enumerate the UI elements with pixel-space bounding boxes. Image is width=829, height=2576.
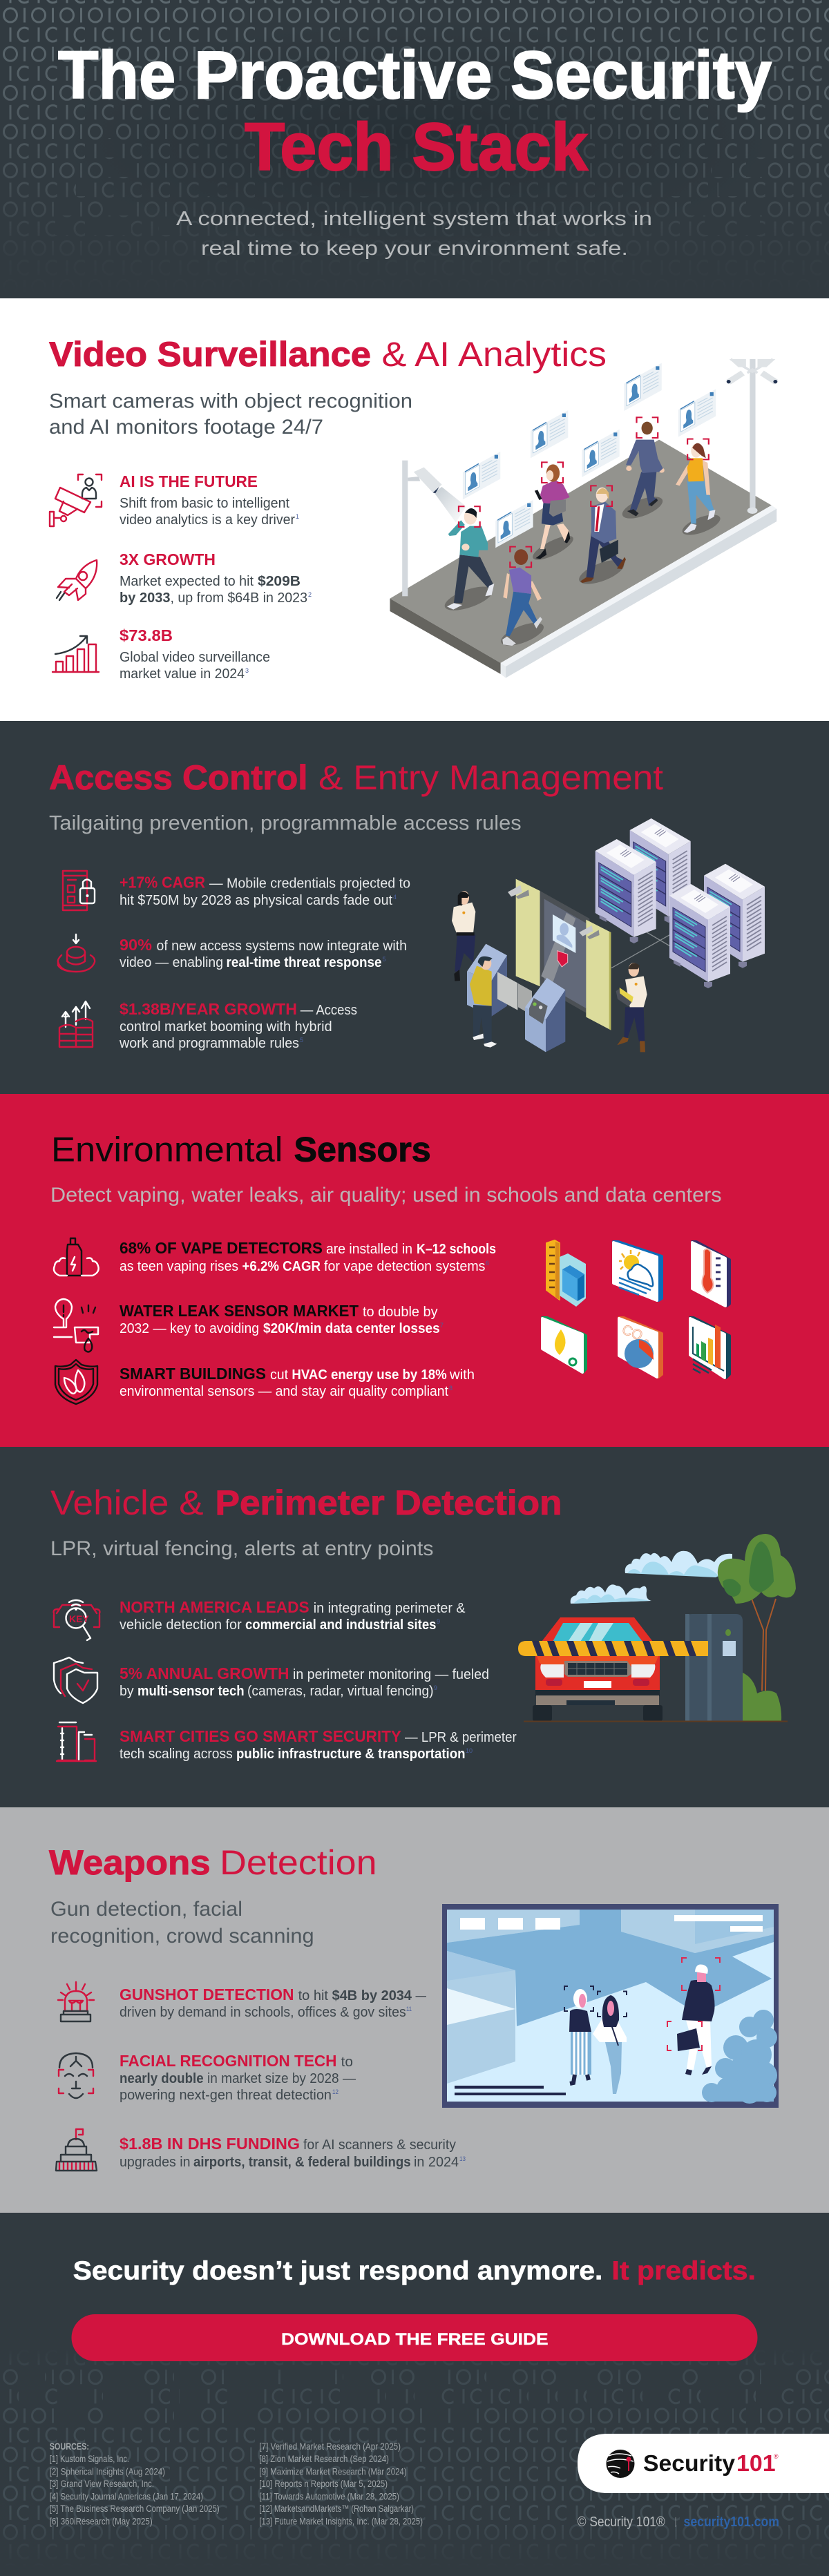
stat text: are installed in — [326, 1242, 412, 1257]
heading — [51, 1131, 431, 1169]
sources: [2] Spherical Insights (Aug 2024) — [50, 2466, 165, 2477]
tile: thermometer — [692, 1242, 730, 1306]
heading: Detection — [220, 1843, 377, 1882]
person: man with bag — [677, 1964, 714, 2075]
screen overlays — [455, 1915, 763, 2095]
closing statement: Security doesn’t just respond anymore. — [73, 2257, 602, 2286]
panel: weapons detection — [0, 1807, 829, 2213]
clouds — [571, 1551, 732, 1604]
stat text: 3X GROWTH — [120, 550, 216, 568]
bush — [743, 1673, 781, 1721]
logo badge: Security — [643, 2450, 736, 2476]
stat: north america — [54, 1598, 466, 1640]
stat text: GUNSHOT DETECTION — [120, 1986, 294, 2003]
stat text — [120, 1239, 496, 1274]
section description: and AI monitors footage 24/7 — [49, 416, 323, 439]
person: yellow top — [676, 443, 723, 539]
button: DOWNLOAD THE FREE GUIDE — [281, 2330, 549, 2349]
sources: [5] The Business Research Company (Jan 2025) — [50, 2503, 220, 2514]
stat text: by — [120, 1684, 134, 1699]
stat text: 13 — [459, 2155, 466, 2162]
stat text: hit $750M by 2028 as physical cards fade out — [120, 893, 392, 908]
stat text: environmental sensors — and stay air quality compliant — [120, 1384, 448, 1399]
title: The Proactive Security — [58, 37, 772, 113]
icon: capitol building — [56, 2129, 97, 2171]
scene background — [447, 1910, 774, 2102]
stat text: 7 — [440, 1322, 444, 1329]
guard left — [452, 891, 475, 981]
stat text: video analytics is a key driver — [120, 512, 295, 528]
icon: skyscrapers — [57, 1722, 96, 1761]
sources: [8] Zion Market Research (Sep 2024) — [259, 2453, 389, 2464]
subtitle: real time to keep your environment safe. — [201, 238, 628, 260]
section description: Detect vaping, water leaks, air quality; used in schools and data centers — [50, 1184, 722, 1207]
tree — [718, 1534, 796, 1691]
icon: siren — [58, 1982, 94, 2021]
stat text: 3 — [245, 667, 249, 674]
stat: mobile credentials — [63, 871, 410, 910]
sources: [6] 360iResearch (May 2025) — [50, 2515, 153, 2526]
stat text: SMART BUILDINGS — [120, 1365, 266, 1383]
heading — [49, 335, 607, 374]
sources: [3] Grand View Research, Inc. — [50, 2478, 154, 2489]
stat text: — LPR & perimeter — [405, 1730, 517, 1745]
stat text: $209B — [258, 574, 301, 589]
stat: AI is the future — [50, 472, 299, 528]
stat text: as teen vaping rises — [120, 1259, 238, 1274]
heading: Sensors — [294, 1131, 431, 1169]
tile: bar chart — [690, 1318, 730, 1378]
panel: environmental sensors — [0, 1094, 829, 1447]
stat text: 5 — [383, 956, 386, 963]
button — [72, 2314, 757, 2361]
stat text: Shift from basic to intelligent — [120, 496, 289, 511]
stat text: 5 — [300, 1037, 303, 1044]
stat text: 12 — [332, 2088, 339, 2095]
stat text: FACIAL RECOGNITION TECH — [120, 2052, 337, 2070]
icon: car under magnifier: KEY — [69, 1613, 89, 1624]
stat text: 5% ANNUAL GROWTH — [120, 1664, 289, 1682]
stat text: K–12 schools — [417, 1242, 496, 1257]
copyright and website: © Security 101® — [578, 2515, 665, 2530]
section description — [49, 390, 412, 439]
stat text — [120, 550, 312, 606]
illustration: sensor tiles — [542, 1240, 730, 1378]
stat text: WATER LEAK SENSOR MARKET — [120, 1302, 359, 1320]
stat: water leak sensor — [54, 1299, 444, 1352]
stat text — [119, 1000, 357, 1051]
stat text: of new access systems now integrate with — [156, 939, 407, 954]
stat: annual growth — [54, 1657, 489, 1703]
stat text: — Access — [301, 1003, 357, 1018]
section description — [50, 1898, 314, 1948]
stat text: — — [416, 1988, 426, 2003]
left camera pole — [402, 461, 466, 596]
stat text: with — [449, 1367, 475, 1383]
stat: gunshot detection — [58, 1982, 426, 2021]
copyright and website — [578, 2515, 779, 2530]
stat text: $1.8B IN DHS FUNDING — [120, 2135, 300, 2153]
stat text: 11 — [406, 2006, 412, 2012]
heading: & AI Analytics — [381, 335, 607, 374]
stat text: commercial and industrial sites — [245, 1617, 436, 1633]
panel: header — [3, 0, 829, 259]
person: woman with long hair — [593, 1995, 627, 2094]
stat text: nearly double — [120, 2071, 204, 2086]
stat text: Global video surveillance — [120, 650, 270, 665]
person: purple shirt — [497, 549, 547, 650]
stat text: upgrades in — [120, 2155, 191, 2170]
stat text: 2 — [308, 591, 312, 598]
gate — [508, 879, 611, 1030]
stat text — [120, 1598, 466, 1633]
panel: access control — [0, 721, 829, 1094]
icon: face scan — [59, 2053, 93, 2098]
stat text — [120, 1986, 426, 2020]
bushes — [702, 2010, 777, 2104]
panel: video surveillance — [0, 298, 829, 721]
stat text — [120, 626, 270, 682]
truck — [533, 1617, 663, 1721]
icon: vape with cloud — [54, 1238, 99, 1276]
stat: 3X growth — [57, 550, 312, 606]
logo mark — [607, 2450, 634, 2478]
subtitle: A connected, intelligent system that works in — [176, 208, 652, 230]
copyright and website: security101.com — [684, 2515, 779, 2530]
panel: footer — [3, 2260, 829, 2546]
ID cards — [463, 363, 716, 548]
stat: smart buildings — [55, 1360, 475, 1404]
icon: leaf shield — [55, 1360, 97, 1404]
sources: [12] MarketsandMarkets™ (Rohan Salgarkar) — [259, 2503, 414, 2514]
stat: facial recognition — [59, 2052, 356, 2103]
stat text: +6.2% CAGR — [242, 1259, 321, 1274]
sources: [13] Future Market Insights, Inc. (Mar 28, 2025) — [259, 2515, 423, 2526]
stat text: $4B by 2034 — [332, 1988, 412, 2003]
stat text: control market booming with hybrid — [120, 1019, 332, 1035]
person: navy suit — [619, 422, 666, 523]
stat text: 10 — [466, 1747, 473, 1754]
sources: [1] Kustom Signals, Inc. — [50, 2453, 129, 2464]
icon: car under magnifier — [54, 1600, 99, 1640]
heading: & Entry Management — [318, 758, 663, 797]
stat text — [120, 1302, 444, 1336]
stat text: market value in 2024 — [120, 666, 245, 682]
stat text: (cameras, radar, virtual fencing) — [247, 1684, 434, 1699]
title: Tech Stack — [245, 109, 589, 184]
detection brackets — [564, 1958, 720, 2050]
stat text: 68% OF VAPE DETECTORS — [120, 1239, 323, 1257]
section description: Gun detection, facial — [50, 1898, 242, 1921]
stat text: AI IS THE FUTURE — [120, 472, 258, 490]
heading — [49, 758, 663, 797]
servers — [595, 818, 765, 988]
illustration: crowd scanning scene — [442, 1904, 779, 2108]
heading: Access Control — [49, 758, 308, 797]
stat text: tech scaling across — [120, 1747, 233, 1762]
stat text: real-time threat response — [227, 955, 381, 970]
logo badge — [578, 2434, 829, 2493]
stat text — [120, 873, 410, 908]
frame — [442, 1904, 779, 2108]
stat text: $1.38B/YEAR GROWTH — [120, 1000, 297, 1018]
tile: weather — [613, 1242, 662, 1300]
stat text: 6 — [486, 1260, 489, 1267]
stat: yearly growth — [59, 1000, 357, 1051]
section description: Tailgaiting prevention, programmable access rules — [49, 812, 522, 834]
stat text: by 2033 — [120, 590, 170, 606]
person: teal sweater — [441, 508, 496, 615]
stat text: powering next-gen threat detection — [120, 2088, 332, 2103]
stat text: NORTH AMERICA LEADS — [120, 1598, 309, 1616]
stat text — [120, 936, 407, 970]
sources: [7] Verified Market Research (Apr 2025) — [259, 2441, 401, 2452]
stat text: 90% — [120, 936, 152, 954]
stat text: work and programmable rules — [119, 1036, 299, 1051]
stat text: for AI scanners & security — [303, 2137, 456, 2153]
tile: water level — [546, 1240, 586, 1307]
icon: layered shields — [54, 1657, 97, 1703]
stat text: airports, transit, & federal buildings — [193, 2155, 411, 2170]
stat text: in perimeter monitoring — fueled — [293, 1667, 489, 1682]
stat text — [120, 1727, 517, 1762]
stat text: video — enabling — [120, 955, 223, 970]
network lines — [611, 931, 670, 968]
sources: [4] Security Journal Americas (Jan 17, 2024) — [50, 2490, 203, 2501]
person: magenta top — [529, 464, 577, 564]
stat text: driven by demand in schools, offices & gov sites — [120, 2005, 406, 2020]
stat: video integration — [58, 934, 407, 972]
stat text: 9 — [434, 1684, 437, 1691]
stat text: multi-sensor tech — [137, 1684, 245, 1699]
stat text — [120, 2052, 356, 2103]
icon: growth chart — [53, 636, 99, 672]
panel: vehicle and perimeter — [0, 1447, 829, 1807]
person: woman with striped skirt — [569, 1989, 591, 2084]
tile: CO2: 2 — [642, 1337, 650, 1348]
icon: rocket — [57, 560, 97, 600]
tile: CO2 — [619, 1318, 662, 1377]
heading: Vehicle & — [50, 1483, 204, 1522]
illustration: people tracked on walkway — [390, 359, 778, 678]
stat text: HVAC energy use by 18% — [292, 1367, 447, 1383]
stat text: +17% CAGR — [120, 873, 205, 891]
stat text — [120, 2135, 466, 2170]
stat text: 9 — [437, 1618, 440, 1625]
stat text: $73.8B — [120, 626, 173, 644]
stat text: to — [341, 2055, 353, 2070]
face tracking brackets — [459, 417, 709, 567]
tile: air leaf — [542, 1318, 586, 1372]
stat: DHS funding — [56, 2129, 466, 2171]
heading: Perimeter Detection — [216, 1483, 562, 1522]
stat text: cut — [270, 1367, 288, 1383]
stat text: to double by — [363, 1305, 438, 1320]
sources: SOURCES: — [50, 2441, 89, 2452]
section description: Smart cameras with object recognition — [49, 390, 412, 413]
icon: layered target — [58, 934, 95, 972]
logo badge: 101 — [736, 2450, 776, 2476]
heading — [50, 1483, 562, 1522]
heading: Video Surveillance — [49, 335, 371, 374]
stat text: in market size by 2028 — — [207, 2071, 356, 2086]
icon: camera watching person — [50, 474, 102, 526]
heading: Environmental — [51, 1131, 283, 1169]
turnstile and kiosk — [467, 944, 565, 1052]
stat text: 8 — [449, 1385, 452, 1392]
stat: vape detectors — [54, 1238, 496, 1276]
barrier post — [685, 1614, 743, 1721]
stat text — [120, 1664, 489, 1699]
title — [58, 37, 772, 184]
stat text: SMART CITIES GO SMART SECURITY — [120, 1727, 401, 1745]
sources: [9] Maximize Market Research (Mar 2024) — [259, 2466, 407, 2477]
stat text: — Mobile credentials projected to — [209, 876, 410, 891]
heading: Weapons — [49, 1843, 211, 1882]
section description: LPR, virtual fencing, alerts at entry points — [50, 1537, 434, 1560]
stat text: in 2024 — [414, 2155, 459, 2170]
ground line — [524, 1721, 788, 1722]
stat text: Market expected to hit — [120, 574, 254, 589]
stat text: 2032 — key to avoiding — [120, 1321, 259, 1336]
icon: coins and arrows — [59, 1001, 93, 1047]
stat text: public infrastructure & transportation — [236, 1747, 466, 1762]
illustration: truck at barrier — [518, 1534, 796, 1722]
person: suit with briefcase — [575, 488, 628, 589]
subtitle — [176, 208, 652, 260]
barrier arm — [518, 1641, 708, 1656]
closing statement: It predicts. — [611, 2257, 756, 2286]
stat text — [120, 1365, 475, 1399]
walkway platform — [390, 440, 776, 678]
guard right — [616, 963, 647, 1052]
stat text: 4 — [393, 894, 397, 901]
stat text: vehicle detection for — [120, 1617, 242, 1633]
stat: smart cities — [57, 1722, 517, 1762]
stat text: for vape detection systems — [324, 1259, 485, 1274]
stat text: in integrating perimeter & — [314, 1601, 466, 1616]
person in yellow hoodie — [470, 957, 497, 1048]
section description: recognition, crowd scanning — [50, 1925, 314, 1948]
logo badge: ® — [774, 2453, 779, 2460]
stat text: , up from $64B in 2023 — [170, 590, 307, 606]
stat text: 1 — [296, 513, 299, 520]
sources — [50, 2441, 423, 2526]
heading — [49, 1843, 377, 1882]
right camera pole — [726, 359, 778, 514]
stat text: to hit — [298, 1988, 328, 2003]
icon: pipe leak — [54, 1299, 98, 1352]
icon: phone with lock — [63, 871, 95, 910]
tile: CO2: CO — [620, 1322, 645, 1344]
stat text — [120, 472, 299, 528]
stat text: $20K/min data center losses — [263, 1321, 440, 1336]
stat: 73.8B — [53, 626, 270, 682]
illustration: access gate and servers — [452, 818, 765, 1052]
sources: [10] Reports n Reports (Mar 5, 2025) — [259, 2478, 388, 2489]
sources: [11] Towards Automotive (Mar 28, 2025) — [259, 2490, 399, 2501]
